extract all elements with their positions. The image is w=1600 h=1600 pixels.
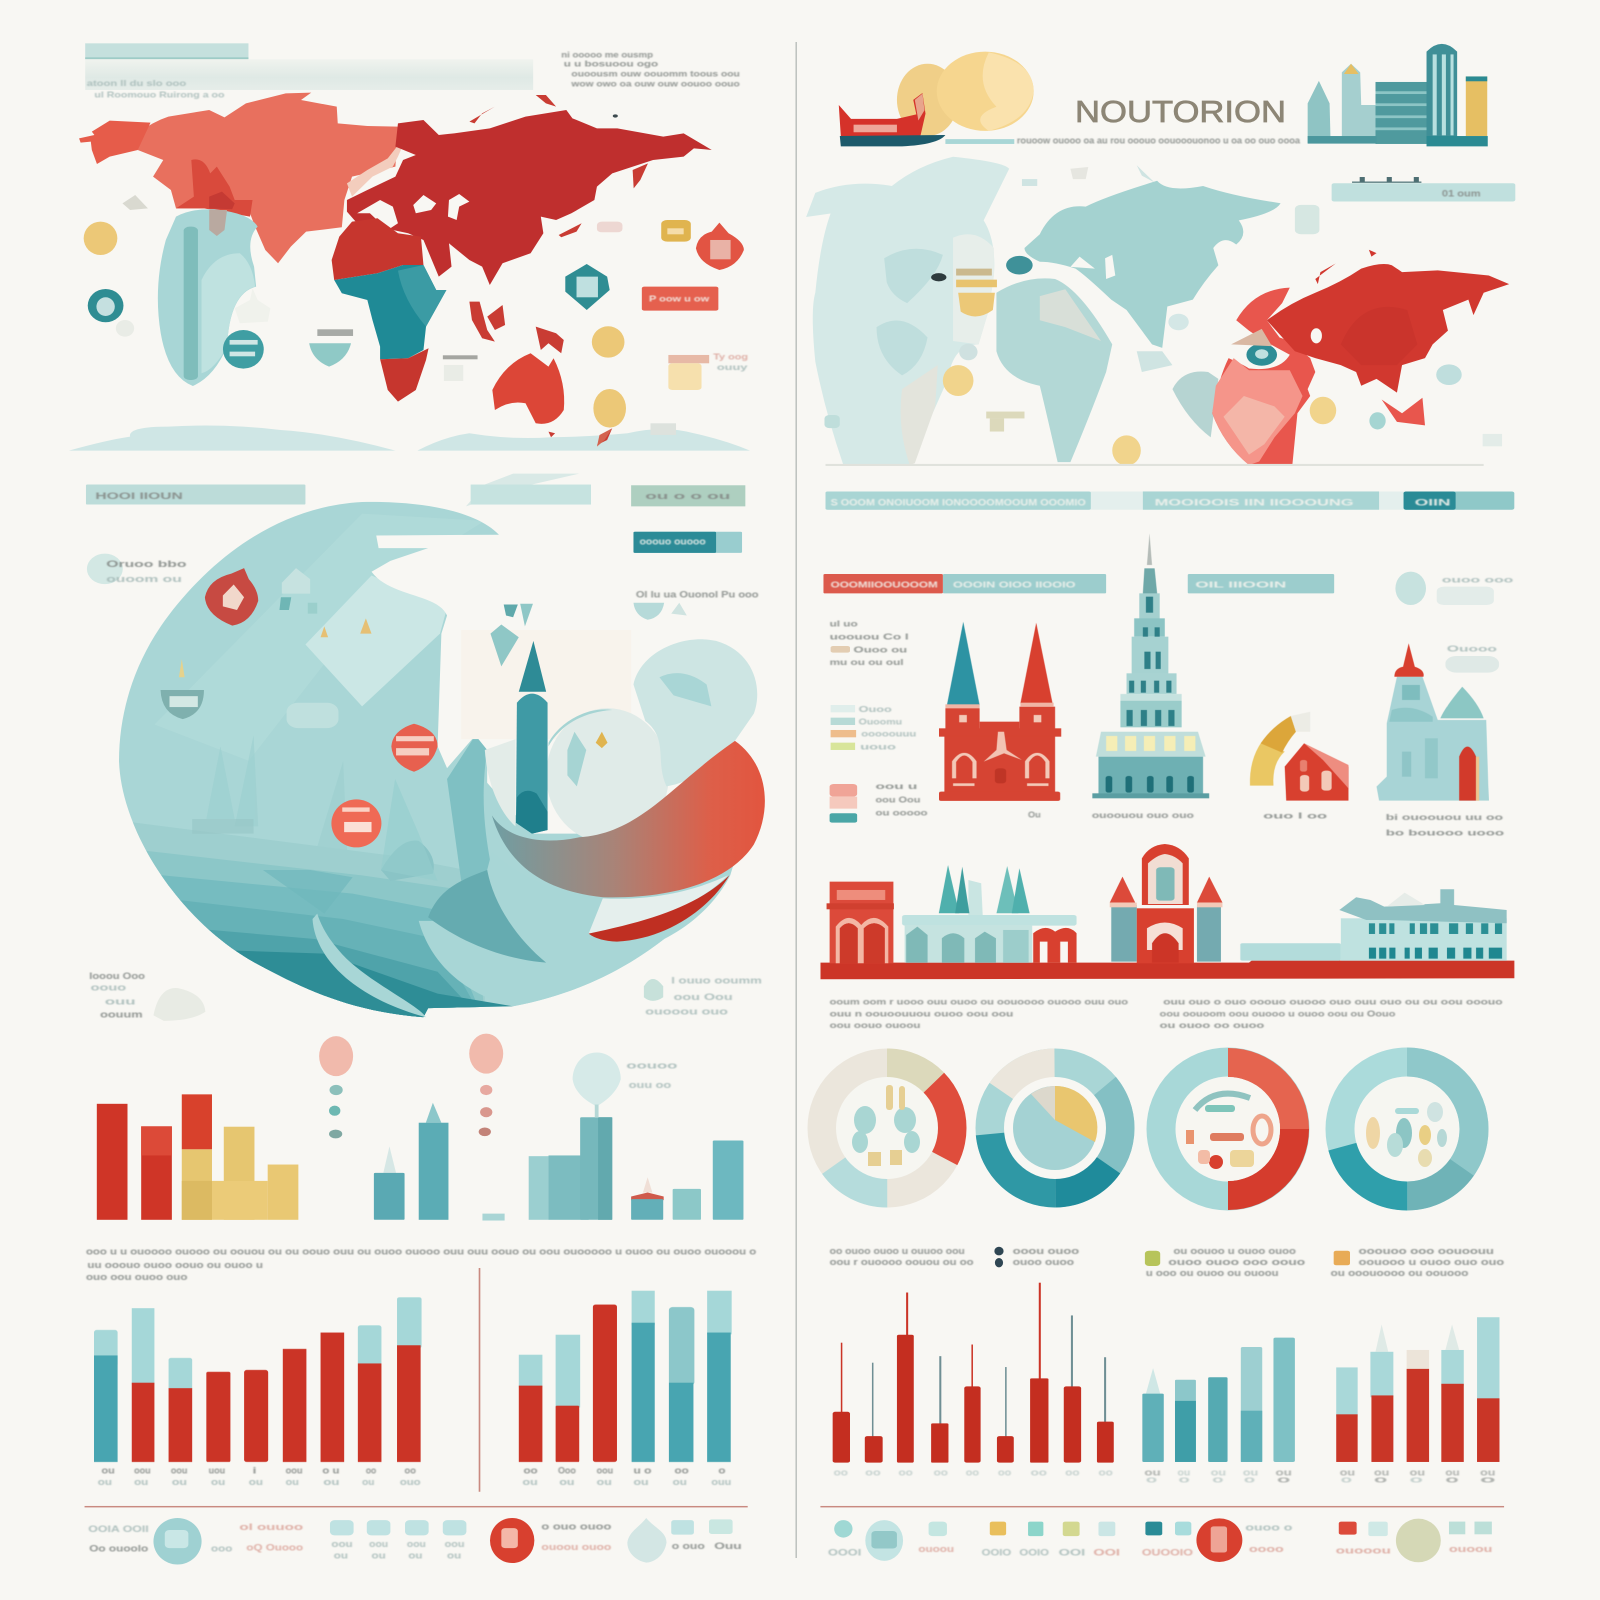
axis labels: ou [249, 1477, 263, 1488]
info bar bottom: OIIN [1415, 498, 1451, 508]
axis labels: oou [171, 1466, 187, 1476]
legend row: ou [408, 1551, 422, 1561]
axis labels: ou [1340, 1468, 1355, 1478]
axis labels: oo [834, 1468, 848, 1478]
side callouts: ouu [105, 997, 136, 1007]
axis labels: oo [1031, 1468, 1047, 1478]
side callouts: oouum [100, 1010, 143, 1020]
chart note labels [626, 1061, 678, 1091]
axis labels: o [1146, 1475, 1157, 1485]
building captions: ouo l oo [1263, 811, 1327, 821]
legend row: ouoou [918, 1544, 954, 1554]
info bar bottom [826, 491, 1514, 510]
skyline captions: ou ouoo oo ouoo [1160, 1021, 1264, 1030]
marker labels: ouuy [717, 363, 748, 372]
donut: teal and red half [1161, 1048, 1309, 1210]
legend row: OOIO [1019, 1548, 1049, 1558]
donut: beige red [822, 1063, 952, 1193]
legend: left list: uoouou Co l [830, 632, 909, 642]
donut: teal with pie centre [990, 1063, 1120, 1193]
header text [87, 50, 740, 100]
legend row: ouooou [1336, 1546, 1391, 1556]
header text: ouoousm ouw oouomm toous oou [571, 70, 740, 79]
axis labels: oo [405, 1466, 416, 1476]
info bar bottom: S OOOM ONOIUOOM IONOOOOMOOUM OOOMIO [831, 498, 1086, 508]
axis labels: ou [1243, 1468, 1258, 1478]
axis labels: o [1480, 1475, 1495, 1485]
donut: teal with doodles [1340, 1062, 1474, 1196]
legend row: oou [407, 1539, 426, 1550]
title: NOUTORION [1075, 94, 1286, 129]
chart icons [319, 1034, 621, 1138]
rule [820, 1506, 1504, 1507]
axis labels: ou [362, 1477, 374, 1488]
info bar bottom: MOOIOOIS IIN IIOOOUNG [1155, 498, 1354, 508]
header banner [85, 43, 533, 90]
axis labels: Ooo [558, 1466, 576, 1476]
skyline: red arch [827, 882, 894, 963]
axis labels: oo [524, 1466, 538, 1476]
side callouts: ouoom ou [106, 574, 182, 585]
map: tall teal drop [158, 209, 270, 386]
chart: teal bars [1142, 1338, 1295, 1462]
panel: pale teal and red world map [806, 157, 1515, 510]
panel: right bar charts [820, 1247, 1504, 1562]
axis labels: ou [523, 1477, 538, 1488]
axis labels: o [1244, 1475, 1255, 1485]
legend notes [830, 1247, 1504, 1278]
paragraph text: uu ooouo ouoo oouo ou ouoo u [87, 1260, 263, 1271]
globe white cutout [372, 492, 768, 834]
legend row: OOIA OOII [88, 1524, 149, 1534]
skyline captions: ooum oom r uooo ouu ouoo ou oouoooo ouooo ouu ouo [830, 998, 1128, 1007]
legend notes: ou ooouoooo ou oouooo [1331, 1268, 1468, 1278]
header bars: HOOI IIOUN [95, 491, 183, 502]
map: salmon continent [79, 93, 408, 263]
legend row: o ouo [672, 1541, 705, 1552]
map: dark red eurasia [347, 110, 712, 285]
legend notes: oouooo u ouoo ouo ouo [1359, 1257, 1504, 1267]
legend notes: ouoo ouoo ooo oouo [1168, 1257, 1305, 1267]
axis labels: ou [286, 1477, 299, 1488]
axis labels: o [1374, 1475, 1387, 1485]
legend row: OUOOIO [1142, 1548, 1193, 1558]
axis labels: ou [98, 1477, 112, 1488]
legend row: oou [331, 1539, 353, 1550]
section header bars: OOOMIIOOUOOOM [831, 580, 938, 590]
map markers [824, 205, 1502, 466]
paragraph text [86, 1247, 757, 1283]
map: sea cutouts [357, 194, 469, 230]
chart note labels: ouu oo [629, 1080, 672, 1091]
axis labels: u o [633, 1466, 652, 1476]
axis labels: ouu [711, 1477, 731, 1488]
marker labels [649, 295, 748, 372]
skyline captions [830, 998, 1503, 1030]
section header bars [823, 572, 1513, 605]
legend row: Ouu [714, 1541, 742, 1552]
header text: ni ooooo me ousmp [561, 50, 653, 60]
legend notes: u ooo ou ouoo ou ouoou [1146, 1268, 1279, 1278]
legend: left list: Ouoo ou [854, 645, 907, 655]
legend row: OOI [1093, 1548, 1120, 1558]
panel: donut charts [822, 1048, 1474, 1210]
subtitle text: rouoow ouooo oa au rou ooouo oouooouonoo u oa oo ouo oooa [1017, 136, 1301, 146]
panel: left bar charts [85, 1034, 757, 1564]
legend row: OOI [1059, 1548, 1085, 1558]
skyline: base [820, 961, 1514, 979]
building: teal tower [1092, 533, 1209, 798]
axis labels: ou [559, 1477, 574, 1488]
axis labels: ou [633, 1477, 649, 1488]
legend: left list: Ouoomu [859, 718, 902, 727]
legend: left list: uouo [860, 742, 896, 752]
axis labels: o [1445, 1475, 1459, 1485]
chart: block bars [97, 1094, 743, 1221]
pale swirl behind tower [461, 630, 757, 843]
axis labels: o [1410, 1475, 1423, 1485]
legend row: o ouo ouoo [541, 1522, 612, 1532]
info bar top right [1332, 177, 1515, 201]
axis labels: oou [134, 1466, 151, 1476]
legend row: ol ouuoo [239, 1522, 304, 1533]
legend row: ou [372, 1551, 386, 1561]
header text: u u bosuoou ogo [564, 60, 658, 69]
header bars: ou o o ou [645, 491, 730, 502]
icon: small leaves near tower [490, 604, 533, 666]
legend row: OOIO [982, 1548, 1011, 1558]
globe pale diamond [305, 575, 447, 706]
map: pale americas [806, 157, 1009, 465]
legend row: ouoou [1449, 1544, 1492, 1554]
axis labels: o [1212, 1475, 1223, 1485]
map: bottom mounds [69, 426, 750, 451]
axis labels [834, 1468, 1495, 1485]
building captions: ouoouou ouo ouo [1092, 811, 1194, 820]
axis labels: oo [366, 1466, 376, 1476]
axis labels: ou [1445, 1468, 1460, 1478]
side callouts: oou Oou [674, 992, 733, 1003]
tower [516, 641, 548, 834]
map: islands and asia bits [469, 95, 648, 445]
paragraph text: ooo u u ouoooo ouooo ou oouou ou ou oouo ouu ou ouoo ouooo ouu ouu oouo ou oou ouooooo u ouoo ou ouoo ouooou o [86, 1247, 757, 1257]
chart: stacked bars left [94, 1297, 422, 1462]
axis labels: o u [322, 1466, 339, 1476]
legend: left list: mu ou ou oul [830, 658, 904, 667]
axis labels: o [1277, 1475, 1290, 1485]
map: australia [492, 353, 564, 424]
info bar top right: 01 oum [1442, 189, 1481, 199]
axis labels: ou [1410, 1468, 1425, 1478]
icon: yellow suns [897, 52, 1034, 136]
legend row [88, 1518, 742, 1564]
axis labels: ou [172, 1477, 187, 1488]
side callouts: Oruoo bbo [106, 559, 187, 570]
chart: red bars with stems [833, 1283, 1114, 1463]
axis labels: ou [1480, 1468, 1495, 1478]
map: teal africa [996, 278, 1112, 462]
legend row: oQ Ouooo [246, 1543, 303, 1553]
map pins on globe [161, 568, 438, 847]
skyline: central gate [1110, 844, 1222, 963]
axis labels: ou [1178, 1468, 1190, 1478]
header bars [86, 474, 745, 553]
legend: left list [830, 620, 928, 823]
building captions [1028, 644, 1504, 838]
legend notes: oo ouoo ouoo u ouuoo oou [830, 1247, 965, 1256]
axis labels: oo [1065, 1468, 1080, 1478]
legend row: ou [447, 1551, 461, 1561]
axis labels: ou [134, 1477, 148, 1488]
legend row: oou [445, 1539, 465, 1550]
map: salmon region [1212, 288, 1315, 465]
legend row: ou [334, 1551, 348, 1561]
building: yellow arc and red house [1250, 712, 1348, 801]
panel: large teal swirl globe [86, 474, 768, 1023]
chart: stacked bars right [519, 1291, 732, 1462]
section header bars: OIL IIIOOIN [1195, 580, 1286, 590]
legend notes: ooou ouoo [1013, 1247, 1079, 1256]
skyline: pale palace [1240, 889, 1507, 961]
skyline: teal cathedral [902, 865, 1077, 963]
header text: atoon ll du slo ooo [87, 79, 186, 88]
marker labels: P oow u ow [649, 295, 709, 304]
legend row [828, 1518, 1492, 1562]
axis labels: ou [673, 1477, 687, 1488]
axis labels: uou [209, 1466, 225, 1476]
axis labels: oou [597, 1466, 613, 1476]
globe leaves [313, 735, 726, 1017]
axis labels: oo [865, 1468, 881, 1478]
axis labels: ouo [400, 1477, 421, 1488]
legend row: Oo ouoolo [89, 1544, 149, 1554]
map: cutouts [1070, 255, 1115, 279]
axis labels: oo [934, 1468, 948, 1478]
skyline captions: ouu ouo o ouo ooouo ouooo ouo ouu ouo ou ou oou ooouo [1163, 998, 1503, 1007]
rule [85, 1506, 748, 1507]
chart note labels: oouoo [626, 1061, 678, 1071]
building captions: Ouooo [1447, 644, 1497, 654]
legend row: oou [369, 1539, 388, 1550]
header bars: ooouo ouooo [640, 537, 706, 547]
building: red church [939, 622, 1061, 801]
legend row: OOOI [828, 1548, 861, 1558]
legend: left list: Ouoo [859, 705, 892, 714]
side callouts: l ouuo ooumm [671, 976, 762, 986]
icon: skyline [1308, 44, 1488, 146]
map: red russia [1267, 250, 1509, 425]
legend notes: ouoo ouoo [1013, 1257, 1074, 1267]
building captions: bi ouoouou uu oo [1386, 813, 1503, 822]
axis labels: ou [1276, 1468, 1292, 1478]
axis labels: ou [1144, 1468, 1161, 1478]
panel: red world map [69, 43, 750, 451]
map: small pale islands [1022, 165, 1218, 437]
axis labels: ou [211, 1477, 225, 1488]
legend row: oooo [1249, 1544, 1284, 1554]
side callouts: ouooou ouo [645, 1007, 728, 1017]
side callouts: Iooou Ooo [89, 971, 145, 982]
axis labels: oo [966, 1468, 979, 1478]
legend notes: ooouoo ooo oouoouu [1359, 1247, 1494, 1256]
axis labels [98, 1466, 731, 1488]
side callouts: Ol lu ua Ouonol Pu ooo [636, 589, 759, 600]
paragraph text: ouo oou ouoo ouo [86, 1272, 188, 1283]
axis labels: ou [1211, 1468, 1226, 1478]
axis labels: ou [323, 1477, 339, 1488]
axis labels: oo [898, 1468, 913, 1478]
skyline captions: oou oouoom oou ouooo u ouoo oou ou Oouo [1160, 1009, 1396, 1019]
marker labels: Ty oog [713, 352, 748, 362]
axis labels: i [253, 1466, 256, 1476]
legend: left list: ul uo [830, 620, 858, 629]
legend notes: ou oouoo u ouoo ouoo [1173, 1247, 1296, 1256]
header text: wow owo oa ouw ouw oouoo oouo [571, 80, 740, 89]
legend row: ouoou ouoo [541, 1542, 612, 1553]
building: pale chapel [1377, 643, 1489, 801]
legend notes: oou r ouoooo oouou ou oo [830, 1257, 973, 1267]
building captions: Ou [1028, 810, 1041, 820]
map markers [84, 114, 744, 447]
axis labels: ou [1374, 1468, 1389, 1478]
panel: landmark buildings [820, 533, 1514, 1030]
axis labels: o [718, 1466, 726, 1476]
axis labels: oo [675, 1466, 689, 1476]
icon: red ship [839, 93, 1014, 146]
icon: pale cloud near chapel [1445, 656, 1499, 673]
axis labels: ou [597, 1477, 612, 1488]
section header bars: ouoo ooo [1442, 576, 1513, 585]
side callouts [87, 554, 762, 1021]
legend row: ouoo o [1245, 1523, 1292, 1533]
red tail [492, 741, 765, 942]
axis labels: ou [102, 1466, 115, 1476]
legend row: ooo [211, 1544, 233, 1554]
building captions: bo bouooo uooo [1386, 829, 1504, 838]
section header bars: OOOIN OIOO IIOOIO [953, 580, 1076, 590]
map baseline [826, 464, 1484, 466]
axis labels: o [1341, 1475, 1352, 1485]
skyline captions: oou oouo ouoou [830, 1021, 921, 1030]
header text: ul Roomouo Ruirong a oo [94, 90, 225, 100]
skyline captions: ouu n oouoouuou ouoo oou oou [830, 1009, 1013, 1019]
panel: header with ship, title and skyline [839, 44, 1488, 146]
legend: left list: oou Oou [876, 795, 921, 805]
legend: left list: ou ooooo [876, 808, 928, 818]
chart: red and pale bars [1336, 1317, 1499, 1462]
side callouts: oouo [91, 983, 126, 993]
axis labels: oo [998, 1468, 1011, 1478]
legend: left list: oou u [876, 782, 918, 791]
map: africa [332, 218, 446, 402]
divider [479, 1268, 480, 1492]
axis labels: oo [1098, 1468, 1113, 1478]
globe base [107, 492, 768, 1023]
axis labels: o [1179, 1475, 1190, 1485]
axis labels: oou [286, 1466, 303, 1476]
map: teal asia [1024, 181, 1281, 348]
legend: left list: ooooouuu [861, 729, 916, 739]
